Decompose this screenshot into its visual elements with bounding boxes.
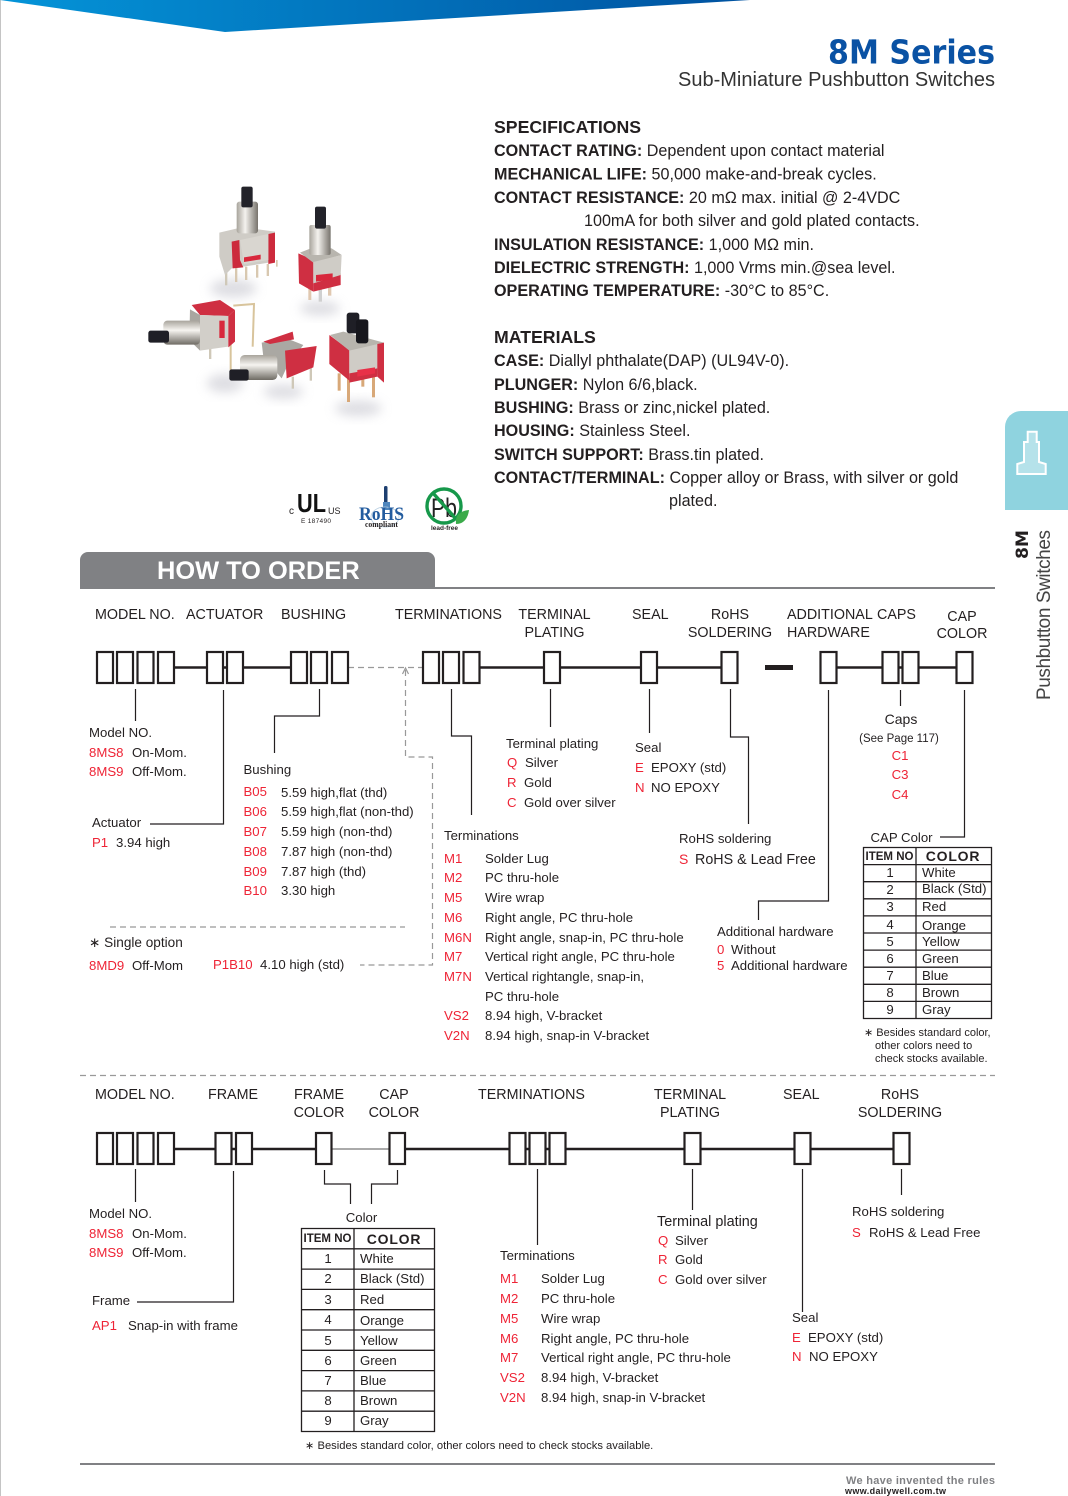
terminations options: Vertical right angle, PC thru-hole xyxy=(485,949,675,964)
terminal plating options: Gold xyxy=(524,775,552,790)
model no. options: Model NO. xyxy=(89,725,152,740)
logo: UL: E 187490 xyxy=(301,518,331,525)
cap color table: Gray xyxy=(922,1002,951,1017)
logo: lead free xyxy=(427,489,469,532)
rohs options xyxy=(679,831,816,868)
bushing options xyxy=(244,762,414,898)
color note: ∗ Besides standard color, other colors need to check stocks available. xyxy=(305,1440,653,1452)
terminations options xyxy=(444,828,684,1043)
additional hardware options: 5 xyxy=(717,958,724,973)
terminations options: M6N xyxy=(444,930,472,945)
order code 1 column headers: TERMINATIONS xyxy=(395,607,502,623)
additional hardware options: Additional hardware xyxy=(731,958,848,973)
order code 2 column headers: MODEL NO. xyxy=(95,1087,175,1103)
cap color table: Black (Std) xyxy=(922,881,986,896)
rohs options 2: RoHS & Lead Free xyxy=(869,1225,980,1240)
cap color table: 1 xyxy=(886,865,894,880)
model no. options: 8MS8 xyxy=(89,745,123,760)
seal options: Seal xyxy=(635,740,661,755)
subtitle: Sub-Miniature Pushbutton Switches xyxy=(678,69,995,91)
terminations options: M6 xyxy=(444,910,462,925)
seal options: N xyxy=(635,780,645,795)
order code 2 column headers: FRAME xyxy=(208,1087,258,1103)
bushing options: 5.59 high,flat (thd) xyxy=(281,785,387,800)
caps options: C1 xyxy=(892,748,908,763)
order code 2 column headers: TERMINAL xyxy=(654,1087,726,1103)
order code 1 column headers: ACTUATOR xyxy=(186,607,263,623)
color table: Blue xyxy=(360,1373,386,1388)
actuator options: P1 xyxy=(92,835,108,850)
color table: Black (Std) xyxy=(360,1271,424,1286)
bushing options: B05 xyxy=(244,784,267,799)
caps options: (See Page 117) xyxy=(859,733,939,745)
model no. options: 8MS9 xyxy=(89,764,123,779)
rohs options: RoHS soldering xyxy=(679,831,771,846)
additional hardware options: Without xyxy=(731,942,776,957)
bushing options: 7.87 high (thd) xyxy=(281,864,366,879)
single option note: Off-Mom xyxy=(132,958,183,973)
single option note xyxy=(89,935,344,973)
model no. options: On-Mom. xyxy=(132,745,187,760)
rohs options: S xyxy=(679,851,688,867)
order code 1 connectors xyxy=(110,668,964,965)
title: 8M Series xyxy=(828,32,995,72)
bushing options: B06 xyxy=(244,804,267,819)
order code 1 column headers: SOLDERING xyxy=(688,625,772,641)
additional hardware options: Additional hardware xyxy=(717,924,834,939)
title xyxy=(678,32,995,91)
model no. options 2: Model NO. xyxy=(89,1206,152,1221)
caps options: C3 xyxy=(892,767,908,782)
order code 2 column headers xyxy=(95,1087,942,1121)
footer xyxy=(80,1463,995,1496)
terminal plating options xyxy=(506,736,616,810)
specifications: 100mA for both silver and gold plated contacts. xyxy=(584,212,920,230)
order code 1 column headers: MODEL NO. xyxy=(95,607,175,623)
terminations options: M1 xyxy=(444,851,462,866)
materials: HOUSING: Stainless Steel. xyxy=(494,422,690,440)
order code 2 connectors xyxy=(136,1169,902,1312)
terminal plating options 2: Gold xyxy=(675,1252,703,1267)
switch: double pole xyxy=(329,313,384,402)
model no. options 2: 8MS9 xyxy=(89,1245,123,1260)
side label xyxy=(1013,530,1055,700)
terminal plating options 2: Gold over silver xyxy=(675,1272,767,1287)
order code 2 column headers: SEAL xyxy=(783,1087,820,1103)
frame options: Frame xyxy=(92,1293,130,1308)
cap color note: check stocks available. xyxy=(875,1053,988,1065)
terminal plating options 2 xyxy=(657,1214,767,1287)
top banner xyxy=(0,0,750,32)
terminal plating options 2: R xyxy=(658,1252,668,1267)
terminations options: Vertical rightangle, snap-in, xyxy=(485,969,644,984)
terminal plating options: R xyxy=(507,775,517,790)
cap color table: Red xyxy=(922,899,946,914)
bushing options: B08 xyxy=(244,844,267,859)
switch: vertical with bracket xyxy=(219,187,278,285)
seal options 2: EPOXY (std) xyxy=(808,1330,883,1345)
actuator options xyxy=(92,815,170,850)
order code 1 column headers: CAP xyxy=(947,609,977,625)
rohs options: RoHS & Lead Free xyxy=(695,852,816,868)
terminations options: V2N xyxy=(444,1028,470,1043)
order code 2 column headers: PLATING xyxy=(660,1105,720,1121)
terminations options 2: M7 xyxy=(500,1350,518,1365)
terminations options 2: M1 xyxy=(500,1271,518,1286)
materials: MATERIALS xyxy=(494,327,596,347)
rohs options 2 xyxy=(852,1204,980,1240)
terminations options: PC thru-hole xyxy=(485,989,559,1004)
bushing options: Bushing xyxy=(244,762,291,777)
terminations options: Right angle, snap-in, PC thru-hole xyxy=(485,930,684,945)
rohs options 2: S xyxy=(852,1225,861,1240)
order code 1 column headers: ADDITIONAL xyxy=(787,607,873,623)
cap color table: 5 xyxy=(886,934,894,949)
seal options 2: E xyxy=(792,1330,801,1345)
specifications: DIELECTRIC STRENGTH: 1,000 Vrms min.@sea level. xyxy=(494,259,895,277)
color table: 8 xyxy=(324,1393,332,1408)
terminations options 2: M6 xyxy=(500,1331,518,1346)
cap color note: other colors need to xyxy=(875,1040,972,1052)
terminations options 2: 8.94 high, V-bracket xyxy=(541,1370,659,1385)
seal options 2: NO EPOXY xyxy=(809,1349,878,1364)
model no. options 2: 8MS8 xyxy=(89,1226,123,1241)
terminal plating options 2: Terminal plating xyxy=(657,1214,758,1230)
cap color table: CAP Color xyxy=(870,830,933,845)
logo: lead free: Pb xyxy=(431,493,457,523)
terminations options: M7 xyxy=(444,949,462,964)
color table: 3 xyxy=(324,1292,332,1307)
terminations options 2: VS2 xyxy=(500,1370,525,1385)
color table: Red xyxy=(360,1292,384,1307)
model no. options: Off-Mom. xyxy=(132,764,187,779)
bushing options: B10 xyxy=(244,883,267,898)
switch: threaded bushing xyxy=(298,207,342,302)
order code 1 column headers: BUSHING xyxy=(281,607,346,623)
color table: White xyxy=(360,1251,394,1266)
terminations options 2: 8.94 high, snap-in V-bracket xyxy=(541,1390,706,1405)
bushing options: B07 xyxy=(244,824,267,839)
terminations options: 8.94 high, snap-in V-bracket xyxy=(485,1028,650,1043)
product photo: switches xyxy=(148,187,384,416)
logo: RoHS: RoHS xyxy=(359,504,404,525)
terminal plating options 2: C xyxy=(658,1272,668,1287)
terminations options 2: M5 xyxy=(500,1311,518,1326)
terminations options: Solder Lug xyxy=(485,851,549,866)
logo: UL: UL xyxy=(297,488,326,518)
order code 1 column headers: COLOR xyxy=(937,626,987,642)
bushing options: 5.59 high (non-thd) xyxy=(281,824,392,839)
seal options xyxy=(635,740,726,795)
model no. options xyxy=(89,725,187,779)
terminations options 2: M2 xyxy=(500,1291,518,1306)
cap color table: 4 xyxy=(886,917,894,932)
additional hardware options xyxy=(717,924,848,973)
switch: right angle with long pins xyxy=(148,300,254,370)
seal options 2 xyxy=(792,1310,883,1364)
side label: 8M xyxy=(1013,530,1033,559)
order code 2 column headers: CAP xyxy=(379,1087,409,1103)
terminations options: Wire wrap xyxy=(485,890,544,905)
model no. options 2: Off-Mom. xyxy=(132,1245,187,1260)
single option note: ∗ Single option xyxy=(89,935,183,950)
color table: 1 xyxy=(324,1251,332,1266)
order code 1 column headers: RoHS xyxy=(711,607,749,623)
terminations options 2: Solder Lug xyxy=(541,1271,605,1286)
cap color table: ITEM NO xyxy=(866,849,914,863)
bushing options: 7.87 high (non-thd) xyxy=(281,844,392,859)
cap color table: 8 xyxy=(886,985,894,1000)
cap color table: Orange xyxy=(922,918,966,933)
terminations options: M2 xyxy=(444,870,462,885)
frame options xyxy=(92,1293,238,1333)
terminations options 2: Terminations xyxy=(500,1248,575,1263)
terminations options 2 xyxy=(500,1248,731,1405)
side tab xyxy=(1005,411,1068,510)
color table: ITEM NO xyxy=(304,1231,352,1245)
cap color table: White xyxy=(922,865,956,880)
frame options: Snap-in with frame xyxy=(128,1318,238,1333)
bushing options: 5.59 high,flat (non-thd) xyxy=(281,804,414,819)
cap color table: 3 xyxy=(886,899,894,914)
logo: lead free: lead-free xyxy=(431,525,458,532)
terminations options: 8.94 high, V-bracket xyxy=(485,1008,603,1023)
color table: Green xyxy=(360,1353,397,1368)
cap color table: 6 xyxy=(886,951,894,966)
color table: Orange xyxy=(360,1313,404,1328)
seal options: E xyxy=(635,760,644,775)
logo: UL xyxy=(289,488,341,525)
cap color note xyxy=(864,1027,991,1065)
terminations options 2: Wire wrap xyxy=(541,1311,600,1326)
materials: SWITCH SUPPORT: Brass.tin plated. xyxy=(494,446,764,464)
materials: CASE: Diallyl phthalate(DAP) (UL94V-0). xyxy=(494,352,789,370)
logo: UL: c xyxy=(289,506,294,517)
terminal plating options: Terminal plating xyxy=(506,736,598,751)
model no. options 2 xyxy=(89,1206,187,1260)
seal options: EPOXY (std) xyxy=(651,760,726,775)
order code 1 column headers xyxy=(95,607,987,642)
actuator options: 3.94 high xyxy=(116,835,170,850)
cap color table: Yellow xyxy=(922,934,960,949)
logo: UL: US xyxy=(328,506,341,516)
specifications: SPECIFICATIONS xyxy=(494,117,641,137)
color table: 5 xyxy=(324,1333,332,1348)
specifications: CONTACT RATING: Dependent upon contact material xyxy=(494,142,885,160)
model no. options 2: On-Mom. xyxy=(132,1226,187,1241)
color table: Brown xyxy=(360,1393,397,1408)
terminations options: PC thru-hole xyxy=(485,870,559,885)
color table: 4 xyxy=(324,1312,332,1327)
cap color note: ∗ Besides standard color, xyxy=(864,1027,991,1039)
color table xyxy=(302,1210,434,1432)
terminations options 2: PC thru-hole xyxy=(541,1291,615,1306)
specifications: INSULATION RESISTANCE: 1,000 MΩ min. xyxy=(494,236,814,254)
switch: right angle xyxy=(229,332,317,389)
bushing options: B09 xyxy=(244,864,267,879)
single option note: 4.10 high (std) xyxy=(260,957,344,972)
seal options: NO EPOXY xyxy=(651,780,720,795)
color table: 9 xyxy=(324,1413,332,1428)
order code 2 column headers: SOLDERING xyxy=(858,1105,942,1121)
specifications: CONTACT RESISTANCE: 20 mΩ max. initial @ 2-4VDC xyxy=(494,189,901,207)
how to order heading: HOW TO ORDER xyxy=(157,557,360,585)
cap color table: 9 xyxy=(886,1002,894,1017)
single option note: 8MD9 xyxy=(89,958,124,973)
caps options: C4 xyxy=(892,787,908,802)
materials: CONTACT/TERMINAL: Copper alloy or Brass, with silver or gold xyxy=(494,469,958,487)
caps options: Caps xyxy=(885,711,917,727)
color table: 7 xyxy=(324,1373,332,1388)
cap color table xyxy=(864,830,992,1018)
terminations options: Right angle, PC thru-hole xyxy=(485,910,633,925)
caps options xyxy=(859,711,939,802)
cap color table: 2 xyxy=(886,882,894,897)
order code 2 column headers: COLOR xyxy=(369,1105,419,1121)
additional hardware options: 0 xyxy=(717,942,724,957)
order code 2 column headers: TERMINATIONS xyxy=(478,1087,585,1103)
terminations options: VS2 xyxy=(444,1008,469,1023)
terminations options 2: Right angle, PC thru-hole xyxy=(541,1331,689,1346)
terminations options: Terminations xyxy=(444,828,519,843)
order code 2 column headers: FRAME xyxy=(294,1087,344,1103)
order code 2 column headers: RoHS xyxy=(881,1087,919,1103)
materials xyxy=(494,327,958,510)
terminations options: M7N xyxy=(444,969,472,984)
specifications: OPERATING TEMPERATURE: -30°C to 85°C. xyxy=(494,282,829,300)
terminal plating options: C xyxy=(507,795,517,810)
terminal plating options 2: Q xyxy=(658,1233,668,1248)
seal options 2: N xyxy=(792,1349,802,1364)
color table: Color xyxy=(346,1210,378,1225)
order code 2 boxes xyxy=(97,1133,910,1164)
terminations options 2: V2N xyxy=(500,1390,526,1405)
frame options: AP1 xyxy=(92,1318,117,1333)
terminal plating options: Gold over silver xyxy=(524,795,616,810)
cap color table: Brown xyxy=(922,985,959,1000)
order code 1 column headers: TERMINAL xyxy=(518,607,591,623)
order code 1 column headers: HARDWARE xyxy=(787,625,870,641)
how to order heading xyxy=(80,552,995,589)
materials: BUSHING: Brass or zinc,nickel plated. xyxy=(494,399,770,417)
order code 1 column headers: CAPS xyxy=(877,607,916,623)
side label: Pushbutton Switches xyxy=(1034,530,1055,700)
cap color table: Green xyxy=(922,951,959,966)
order code 1 boxes xyxy=(97,652,972,683)
single option note: P1B10 xyxy=(213,957,253,972)
cap color table: COLOR xyxy=(926,848,980,864)
color table: 2 xyxy=(324,1271,332,1286)
bushing options: 3.30 high xyxy=(281,883,335,898)
cap color table: Blue xyxy=(922,968,948,983)
color table: COLOR xyxy=(367,1231,421,1247)
specifications xyxy=(494,117,920,300)
cap color table: 7 xyxy=(886,968,894,983)
terminal plating options: Silver xyxy=(525,755,559,770)
materials: plated. xyxy=(669,492,717,510)
rohs options 2: RoHS soldering xyxy=(852,1204,944,1219)
seal options 2: Seal xyxy=(792,1310,818,1325)
terminal plating options: Q xyxy=(507,755,517,770)
terminations options: M5 xyxy=(444,890,462,905)
order code 2 column headers: COLOR xyxy=(294,1105,344,1121)
footer: www.dailywell.com.tw xyxy=(844,1486,947,1496)
footer: We have invented the rules xyxy=(846,1475,995,1487)
logo: RoHS xyxy=(359,486,404,529)
icon: switch silhouette xyxy=(1017,432,1046,474)
terminations options 2: Vertical right angle, PC thru-hole xyxy=(541,1350,731,1365)
order code 1 column headers: PLATING xyxy=(524,625,585,641)
actuator options: Actuator xyxy=(92,815,142,830)
specifications: MECHANICAL LIFE: 50,000 make-and-break cycles. xyxy=(494,166,877,184)
color table: 6 xyxy=(324,1353,332,1368)
color table: Yellow xyxy=(360,1333,398,1348)
terminal plating options 2: Silver xyxy=(675,1233,709,1248)
logo: RoHS: compliant xyxy=(365,519,398,529)
color table: Gray xyxy=(360,1413,389,1428)
materials: PLUNGER: Nylon 6/6,black. xyxy=(494,376,698,394)
order code 1 column headers: SEAL xyxy=(632,607,669,623)
